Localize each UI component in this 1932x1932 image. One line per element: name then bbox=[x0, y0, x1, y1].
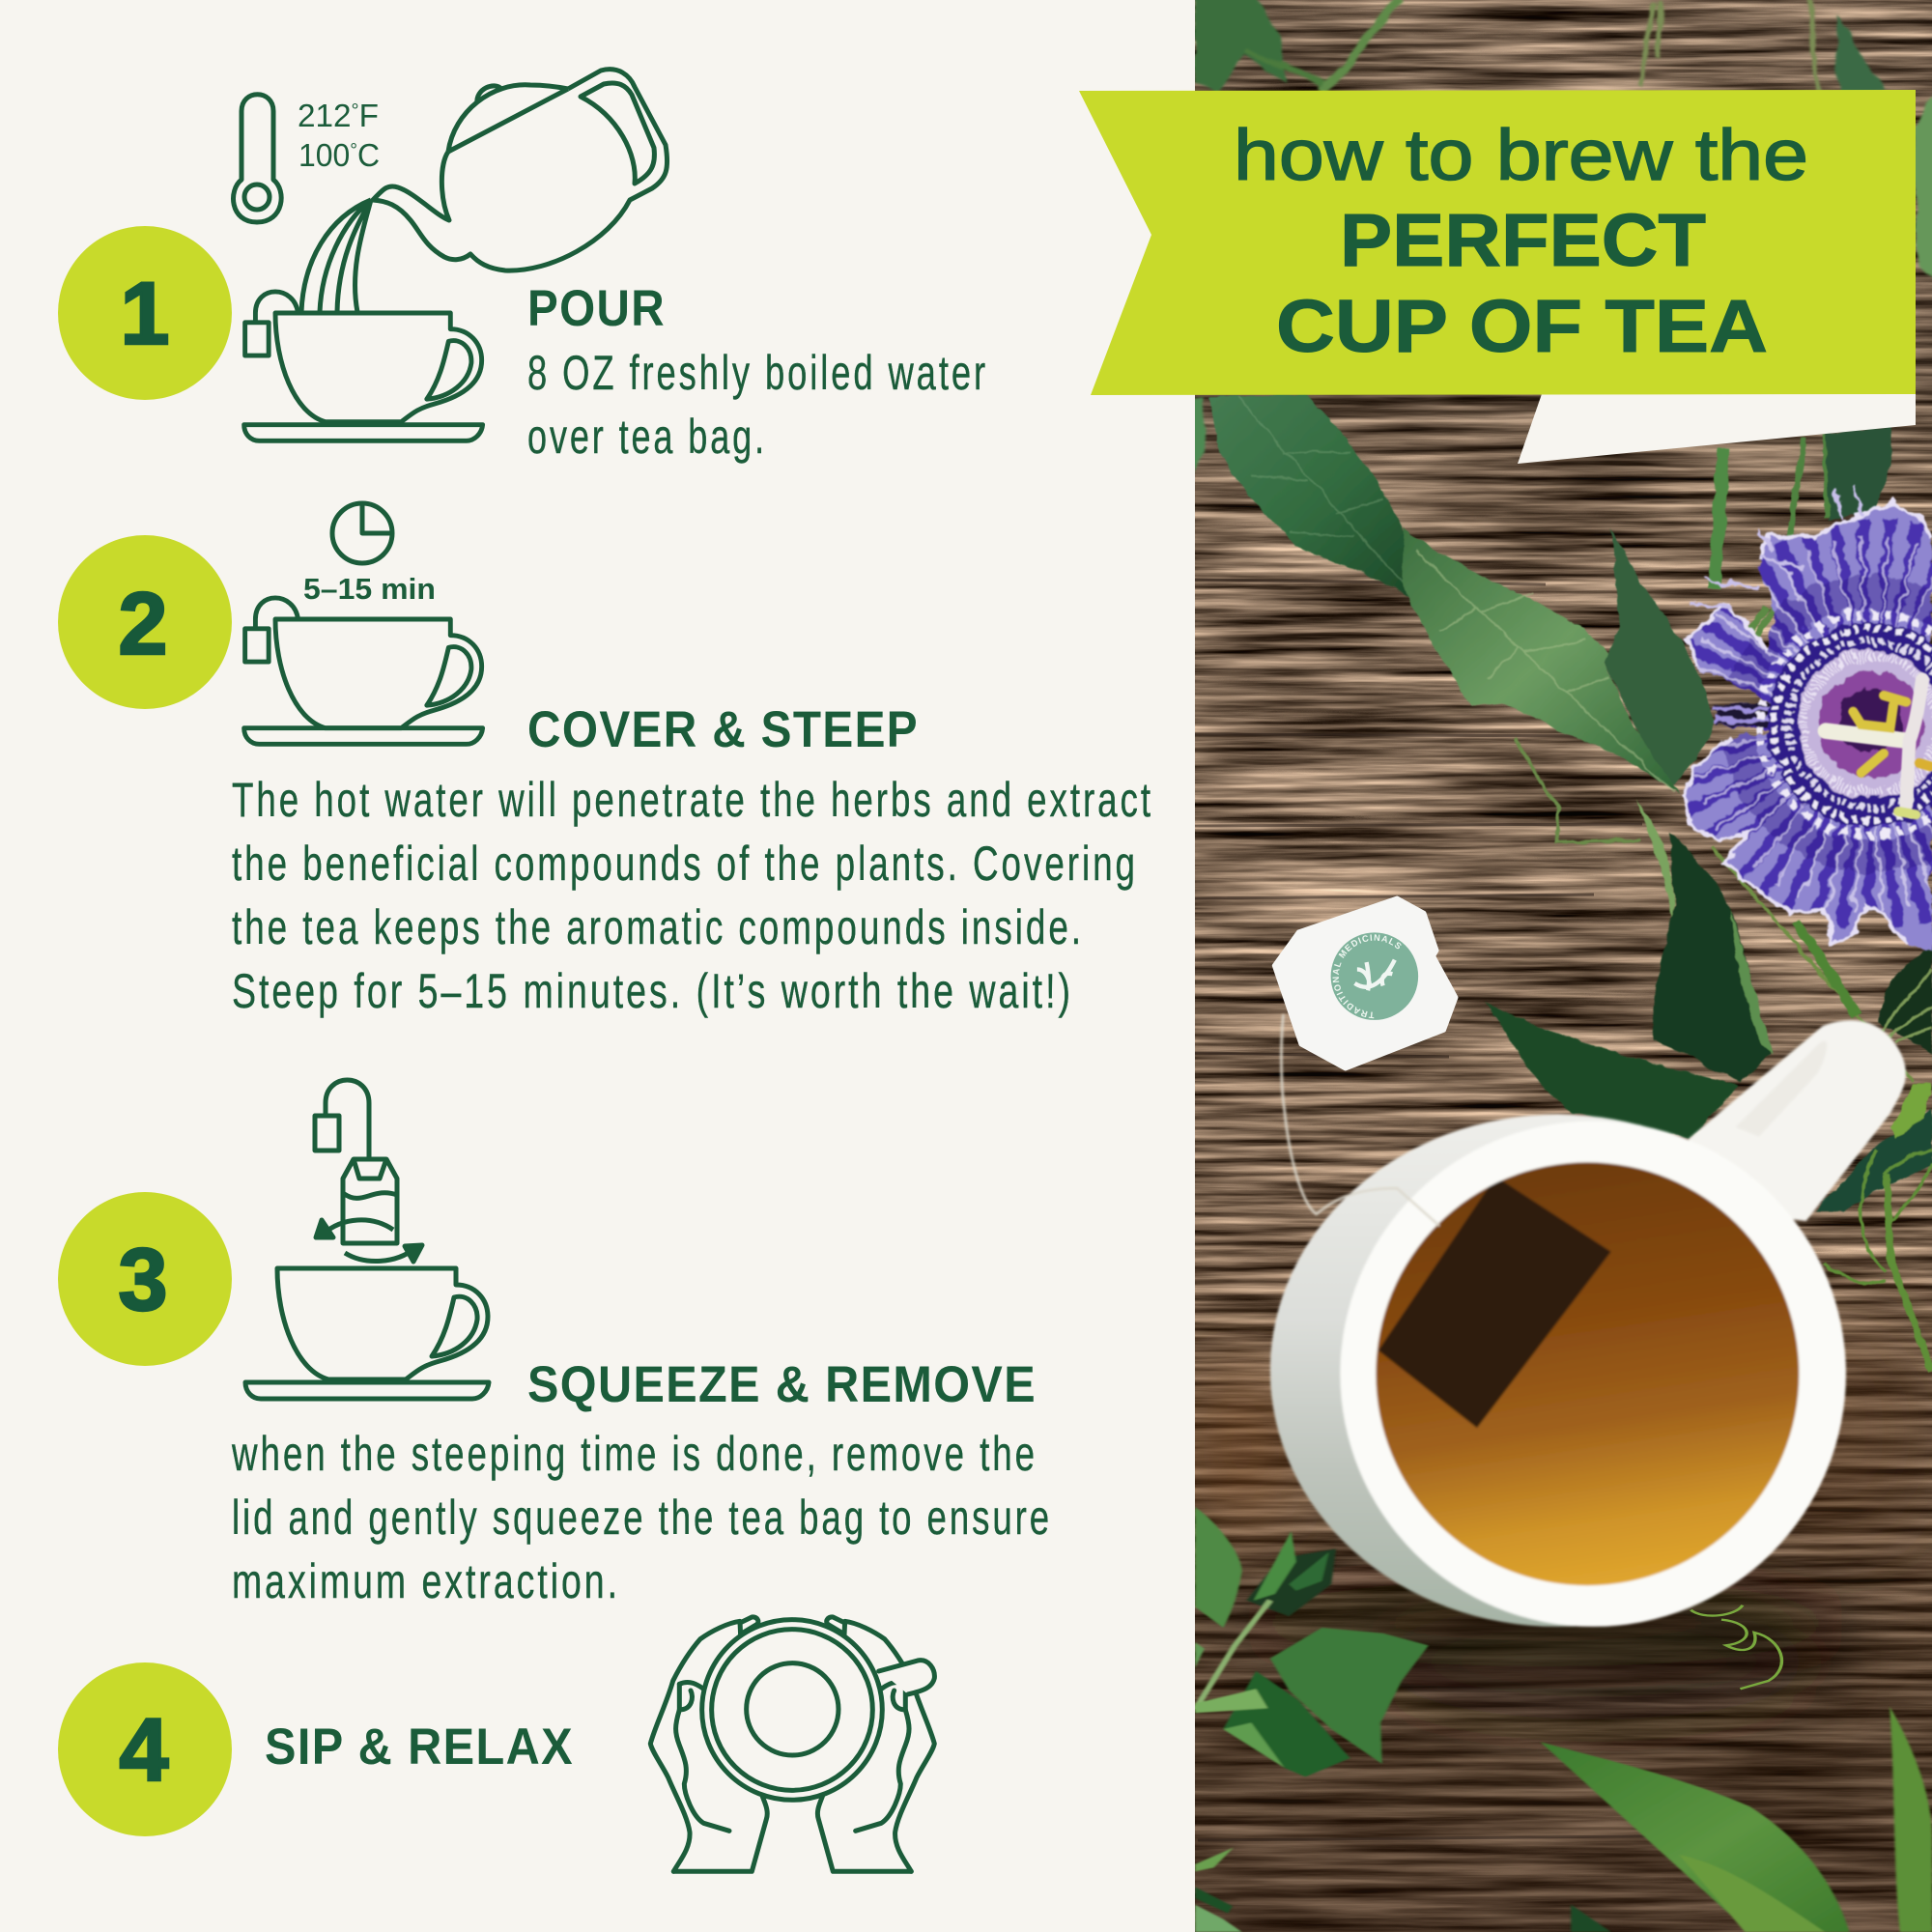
step 1 bbox=[58, 70, 988, 464]
step 4 heading: SIP & RELAX bbox=[265, 1719, 574, 1776]
tea bag string bbox=[1281, 1014, 1439, 1226]
mint leaves bottom left bbox=[1195, 1507, 1429, 1932]
step 2 text: the beneficial compounds of the plants. Covering bbox=[232, 837, 1138, 891]
photo: tea mug on wooden table bbox=[1195, 0, 1932, 1932]
left hand bbox=[650, 1617, 767, 1871]
icon: clock bbox=[332, 503, 392, 563]
banner ribbon bbox=[1079, 90, 1916, 395]
passion flower bbox=[1681, 483, 1932, 952]
temperature labels: C bbox=[357, 137, 380, 173]
mug body bbox=[1268, 1113, 1644, 1629]
icon: squeezed tea bag bbox=[315, 1080, 422, 1262]
step 2 text: The hot water will penetrate the herbs and extract bbox=[232, 773, 1153, 827]
step 1 text bbox=[527, 346, 988, 464]
number badge 3 bbox=[58, 1192, 232, 1366]
top-edge foliage bbox=[1188, 0, 1932, 478]
mug rim bbox=[1340, 1121, 1846, 1627]
background panel bbox=[0, 0, 1195, 1932]
icon: hands holding cup bbox=[650, 1617, 934, 1871]
number badge 4 bbox=[58, 1662, 232, 1836]
wood table bbox=[1183, 0, 1932, 1932]
step 1 text: over tea bag. bbox=[527, 410, 767, 464]
title: perfect: PERFECT bbox=[1340, 199, 1706, 282]
leaves and stems above the mug bbox=[1209, 395, 1932, 1139]
number badge 2: 2 bbox=[118, 575, 168, 673]
temperature labels bbox=[298, 98, 380, 173]
flower stamens bbox=[1826, 679, 1930, 814]
temperature labels: 212 bbox=[298, 98, 351, 133]
temperature labels: 100 bbox=[298, 137, 352, 173]
number badge 1: 1 bbox=[120, 265, 170, 363]
icon: cup with tea bag bbox=[244, 292, 483, 440]
step 2 text bbox=[232, 773, 1153, 1018]
step 3 text bbox=[231, 1427, 1052, 1608]
cup rings bbox=[702, 1620, 882, 1800]
title: cup of tea: CUP OF TEA bbox=[1276, 285, 1768, 368]
number badge 1 bbox=[58, 226, 232, 400]
step 1 text: 8 OZ freshly boiled water bbox=[527, 346, 988, 400]
steep time label: 5–15 min bbox=[303, 572, 436, 606]
cup handle bbox=[879, 1661, 934, 1694]
tea bag tag: TRADITIONAL MEDICINALS bbox=[1333, 934, 1401, 1018]
tea bag tag bbox=[1271, 896, 1459, 1070]
temperature labels: ° bbox=[350, 140, 357, 161]
icon: cup bbox=[245, 1268, 489, 1399]
tea surface bbox=[1376, 1162, 1799, 1585]
number badge 4: 4 bbox=[119, 1701, 169, 1800]
title: how to brew the: how to brew the bbox=[1234, 115, 1808, 195]
white mug with tea bbox=[1270, 1014, 1906, 1627]
step 2 heading: COVER & STEEP bbox=[527, 701, 919, 758]
banner fold bbox=[1518, 391, 1916, 464]
step 3 bbox=[58, 1080, 1052, 1608]
step 3 text: lid and gently squeeze the tea bag to ensure bbox=[232, 1491, 1052, 1545]
tea bag in cup bbox=[1378, 1177, 1611, 1428]
mug handle bbox=[1689, 1020, 1906, 1221]
large leaves bottom bbox=[1541, 1707, 1932, 1932]
step 4 bbox=[58, 1617, 934, 1871]
step 1 heading: POUR bbox=[527, 280, 666, 337]
step 3 heading: SQUEEZE & REMOVE bbox=[527, 1356, 1037, 1413]
curled tendril bbox=[1690, 1605, 1781, 1689]
temperature labels: F bbox=[359, 98, 379, 133]
icon: teapot pouring bbox=[301, 70, 668, 312]
step 2 text: the tea keeps the aromatic compounds inside. bbox=[232, 900, 1084, 954]
vine and dark leaf right of mug bbox=[1815, 1083, 1932, 1372]
number badge 3: 3 bbox=[118, 1231, 168, 1329]
temperature labels: ° bbox=[352, 100, 359, 122]
step 3 text: when the steeping time is done, remove the bbox=[231, 1427, 1037, 1481]
step 2 bbox=[58, 503, 1153, 1018]
right hand bbox=[817, 1617, 934, 1871]
step 3 text: maximum extraction. bbox=[232, 1554, 620, 1608]
number badge 2 bbox=[58, 535, 232, 709]
icon: cup with tea bag bbox=[244, 598, 483, 744]
banner bbox=[1079, 90, 1916, 464]
step 2 text: Steep for 5–15 minutes. (It’s worth the wait!) bbox=[232, 964, 1073, 1018]
icon: thermometer bbox=[234, 95, 281, 222]
